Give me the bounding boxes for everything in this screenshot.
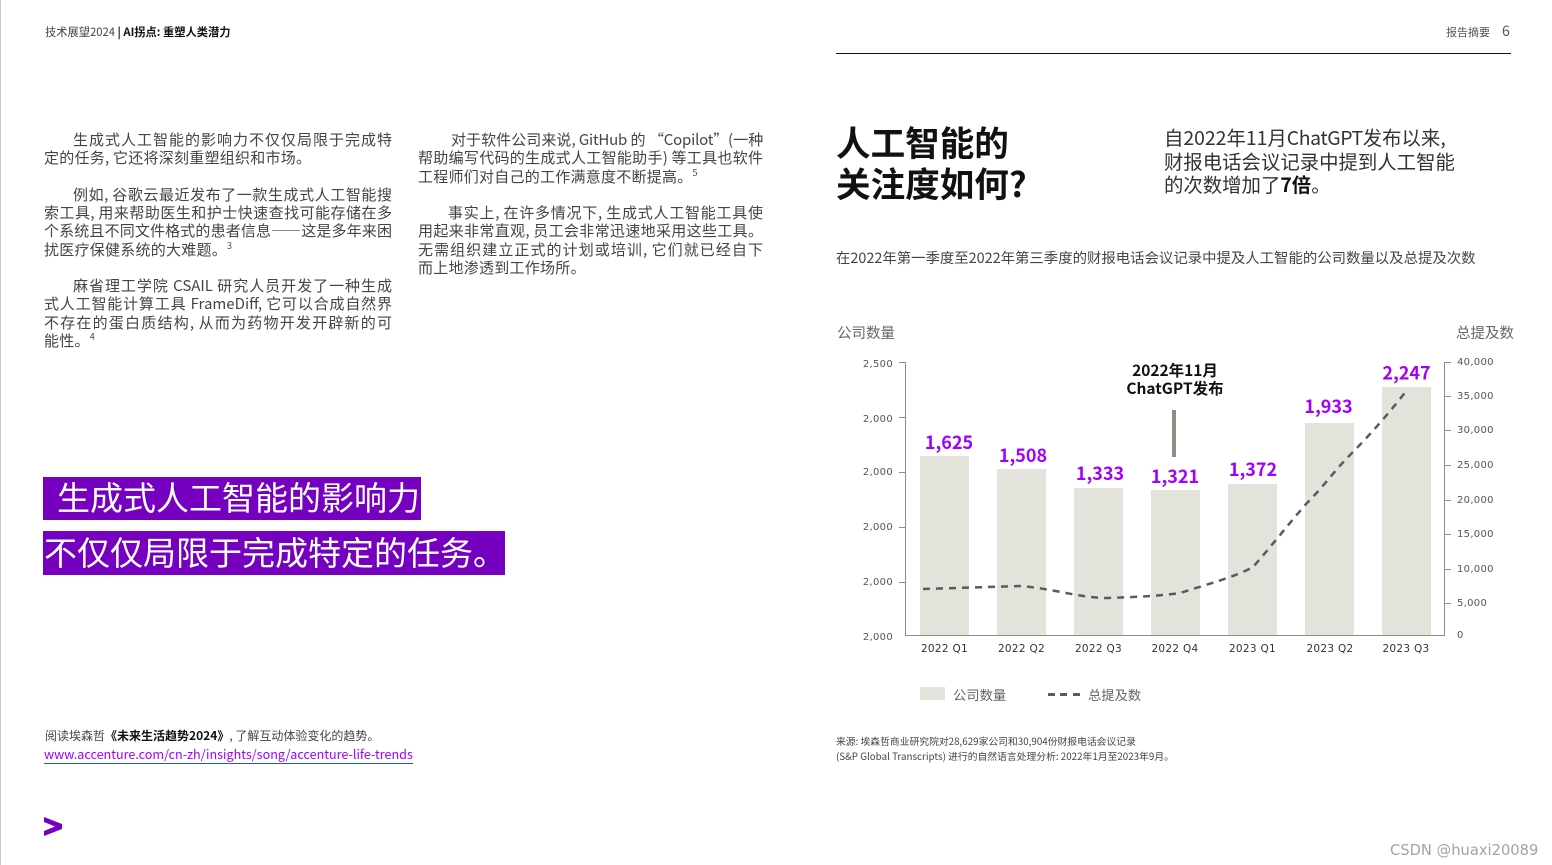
text column 2: 工程师们对自己的工作满意度不断提高。5 bbox=[418, 166, 698, 186]
reading note: 阅读埃森哲《未来生活趋势2024》, 了解互动体验变化的趋势。 bbox=[45, 727, 379, 744]
text column 2: 用起来非常直观, 员工会非常迅速地采用这些工具。 bbox=[418, 220, 763, 241]
text column 1: 麻省理工学院 CSAIL 研究人员开发了一种生成 bbox=[73, 275, 392, 296]
source note: (S&P Global Transcripts) 进行的自然语言处理分析: 2022年1月至2023年9月。 bbox=[836, 749, 1174, 763]
ChatGPT annotation bbox=[1126, 359, 1224, 457]
bar value labels: 1,625 bbox=[925, 429, 973, 455]
right axis labels bbox=[1457, 357, 1494, 641]
legend: company count: 公司数量 bbox=[953, 685, 1006, 704]
text column 1: 式人工智能计算工具 FrameDiff, 它可以合成自然界 bbox=[44, 293, 392, 314]
left axis labels: 2,000 bbox=[863, 467, 893, 478]
icon: accenture chevron logo bbox=[44, 817, 62, 836]
text column 1: 个系统且不同文件格式的患者信息——这是多年来困 bbox=[44, 220, 392, 241]
chart subtitle: 在2022年第一季度至2022年第三季度的财报电话会议记录中提及人工智能的公司数量以及总提及次数 bbox=[836, 247, 1476, 268]
header: report title: 技术展望2024 | AI拐点: 重塑人类潜力 bbox=[45, 24, 231, 40]
purple highlighted quote bbox=[43, 472, 506, 575]
quarter labels: 2022 Q2 bbox=[998, 643, 1045, 655]
source note: 来源: 埃森哲商业研究院对28,629家公司和30,904份财报电话会议记录 bbox=[836, 734, 1136, 748]
quarter labels: 2022 Q3 bbox=[1075, 643, 1122, 655]
right axis title: 总提及数 bbox=[1456, 322, 1514, 343]
axes and ticks bbox=[899, 362, 1451, 636]
quarter labels bbox=[921, 643, 1430, 655]
left axis labels: 2,500 bbox=[863, 359, 893, 370]
key finding text: 的次数增加了7倍。 bbox=[1164, 169, 1331, 198]
ChatGPT annotation: ChatGPT发布 bbox=[1126, 377, 1224, 399]
right axis labels: 35,000 bbox=[1457, 391, 1494, 402]
header: section name and page number: 6 bbox=[1502, 21, 1510, 41]
link: www.accenture.com/cn-zh/insights/song/accenture-life-trends bbox=[44, 744, 413, 763]
right axis labels: 5,000 bbox=[1457, 598, 1487, 609]
bar value labels: 1,508 bbox=[999, 442, 1047, 468]
right axis labels: 25,000 bbox=[1457, 460, 1494, 471]
right axis labels: 30,000 bbox=[1457, 425, 1494, 436]
quarter labels: 2023 Q3 bbox=[1382, 643, 1430, 655]
right axis labels: 40,000 bbox=[1457, 357, 1494, 368]
bar value labels: 1,321 bbox=[1151, 463, 1199, 489]
watermark: CSDN @huaxi20089 bbox=[1390, 842, 1538, 859]
left page edge bbox=[0, 0, 1, 865]
text column 1: 索工具, 用来帮助医生和护士快速查找可能存储在多 bbox=[44, 202, 392, 223]
heading: 人工智能的 bbox=[836, 116, 1009, 166]
quarter labels: 2023 Q1 bbox=[1229, 643, 1276, 655]
quote line 2: 不仅仅局限于完成特定的任务。 bbox=[44, 527, 506, 575]
key finding text bbox=[1164, 122, 1455, 198]
left axis labels: 2,000 bbox=[863, 414, 893, 425]
quarter labels: 2022 Q1 bbox=[921, 643, 968, 655]
ChatGPT annotation: 2022年11月 bbox=[1132, 359, 1218, 381]
text column 1: 不存在的蛋白质结构, 从而为药物开发开辟新的可 bbox=[44, 312, 392, 332]
header: section name and page number bbox=[1446, 21, 1510, 41]
source note bbox=[836, 734, 1174, 763]
key finding text: 自2022年11月ChatGPT发布以来, bbox=[1164, 122, 1446, 151]
bar value labels bbox=[925, 360, 1431, 489]
left axis labels: 2,000 bbox=[863, 577, 893, 588]
bars bbox=[920, 387, 1431, 635]
chart legend bbox=[920, 685, 1141, 704]
combo chart bbox=[837, 322, 1514, 655]
text column 1: 生成式人工智能的影响力不仅仅局限于完成特 bbox=[73, 129, 392, 150]
bar value labels: 1,333 bbox=[1076, 460, 1124, 486]
text column 2 bbox=[418, 129, 763, 278]
left axis title: 公司数量 bbox=[837, 322, 895, 343]
text column 2: 对于软件公司来说, GitHub 的 “Copilot”(一种 bbox=[451, 129, 763, 150]
header rule bbox=[836, 53, 1511, 54]
total mentions dashed line bbox=[923, 390, 1407, 598]
text column 1 bbox=[44, 129, 392, 351]
heading: 关注度如何? bbox=[836, 157, 1027, 207]
header: section name and page number: 报告摘要 bbox=[1446, 24, 1490, 40]
text column 2: 事实上, 在许多情况下, 生成式人工智能工具使 bbox=[448, 202, 763, 223]
right axis labels: 0 bbox=[1457, 630, 1464, 641]
right axis labels: 20,000 bbox=[1457, 495, 1494, 506]
text column 2: 而上地渗透到工作场所。 bbox=[418, 257, 586, 278]
text column 2: 无需组织建立正式的计划或培训, 它们就已经自下 bbox=[418, 238, 763, 260]
quarter labels: 2022 Q4 bbox=[1151, 643, 1199, 655]
right axis labels: 10,000 bbox=[1457, 564, 1494, 575]
right axis labels: 15,000 bbox=[1457, 529, 1494, 540]
key finding text: 财报电话会议记录中提到人工智能 bbox=[1164, 146, 1455, 174]
left axis labels: 2,000 bbox=[863, 522, 893, 533]
quote line 1: 生成式人工智能的影响力 bbox=[57, 472, 420, 520]
bar value labels: 2,247 bbox=[1382, 360, 1431, 386]
legend: company count bbox=[920, 685, 1006, 704]
bar value labels: 1,372 bbox=[1229, 456, 1277, 482]
legend: total mentions: 总提及数 bbox=[1088, 685, 1141, 704]
text column 1: 例如, 谷歌云最近发布了一款生成式人工智能搜 bbox=[73, 184, 392, 205]
quarter labels: 2023 Q2 bbox=[1306, 643, 1354, 655]
bar value labels: 1,933 bbox=[1304, 393, 1353, 419]
text column 1: 定的任务, 它还将深刻重塑组织和市场。 bbox=[44, 147, 311, 168]
text column 1: 扰医疗保健系统的大难题。3 bbox=[44, 238, 232, 260]
left axis labels bbox=[863, 359, 893, 643]
heading bbox=[836, 116, 1027, 207]
text column 2: 帮助编写代码的生成式人工智能助手) 等工具也软件 bbox=[418, 147, 763, 168]
left axis labels: 2,000 bbox=[863, 632, 893, 643]
text column 1: 能性。4 bbox=[44, 330, 95, 351]
